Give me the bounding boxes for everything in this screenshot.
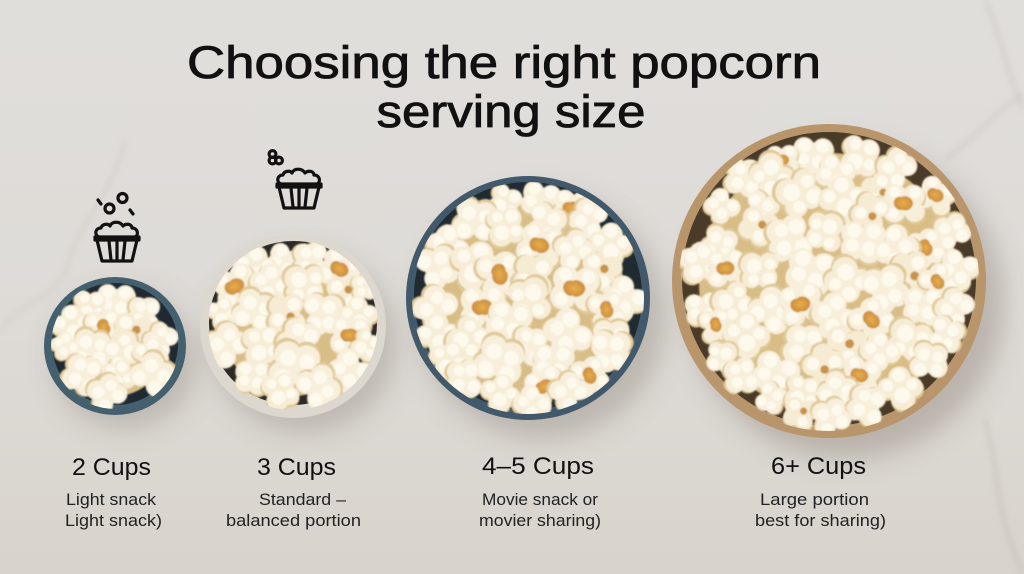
label: 3 cups: 3 Cups — [257, 454, 336, 481]
panel: 4-5 cups bowl — [404, 173, 654, 430]
label: 2 cups — [65, 454, 162, 530]
title — [187, 37, 821, 137]
label: 4-5 cups — [479, 453, 601, 530]
panel: 6+ cups bowl — [672, 124, 987, 439]
icon: popcorn bucket with kernels, 3 cups — [269, 151, 321, 208]
label: 4-5 cups: 4–5 Cups — [482, 453, 594, 480]
popcorn: 4-5 cups — [412, 182, 644, 414]
label: 6+ cups: Large portion — [760, 491, 869, 509]
bowl cast shadows — [53, 146, 1004, 458]
label: 2 cups: 2 Cups — [72, 454, 151, 481]
label: 2 cups: Light snack) — [65, 512, 162, 530]
panel: 3 cups bowl — [196, 234, 386, 421]
label: 3 cups: balanced portion — [226, 512, 361, 530]
label: 3 cups: Standard – — [259, 491, 347, 509]
popcorn: 3 cups — [208, 242, 378, 410]
popcorn: 6+ cups — [674, 128, 987, 439]
label: 2 cups: Light snack — [66, 491, 157, 509]
title: serving size — [376, 86, 646, 137]
label: 4-5 cups: Movie snack or — [482, 491, 599, 509]
label: 3 cups — [226, 454, 361, 530]
icon: popcorn bucket with flying kernels, 2 cups — [95, 194, 139, 261]
label: 6+ cups — [755, 453, 886, 530]
label: 6+ cups: 6+ Cups — [771, 453, 866, 480]
panel: 2 cups bowl — [44, 277, 186, 418]
popcorn: 2 cups — [51, 283, 179, 409]
title: Choosing the right popcorn — [187, 37, 821, 88]
label: 4-5 cups: movier sharing) — [479, 512, 601, 530]
label: 6+ cups: best for sharing) — [755, 512, 886, 530]
